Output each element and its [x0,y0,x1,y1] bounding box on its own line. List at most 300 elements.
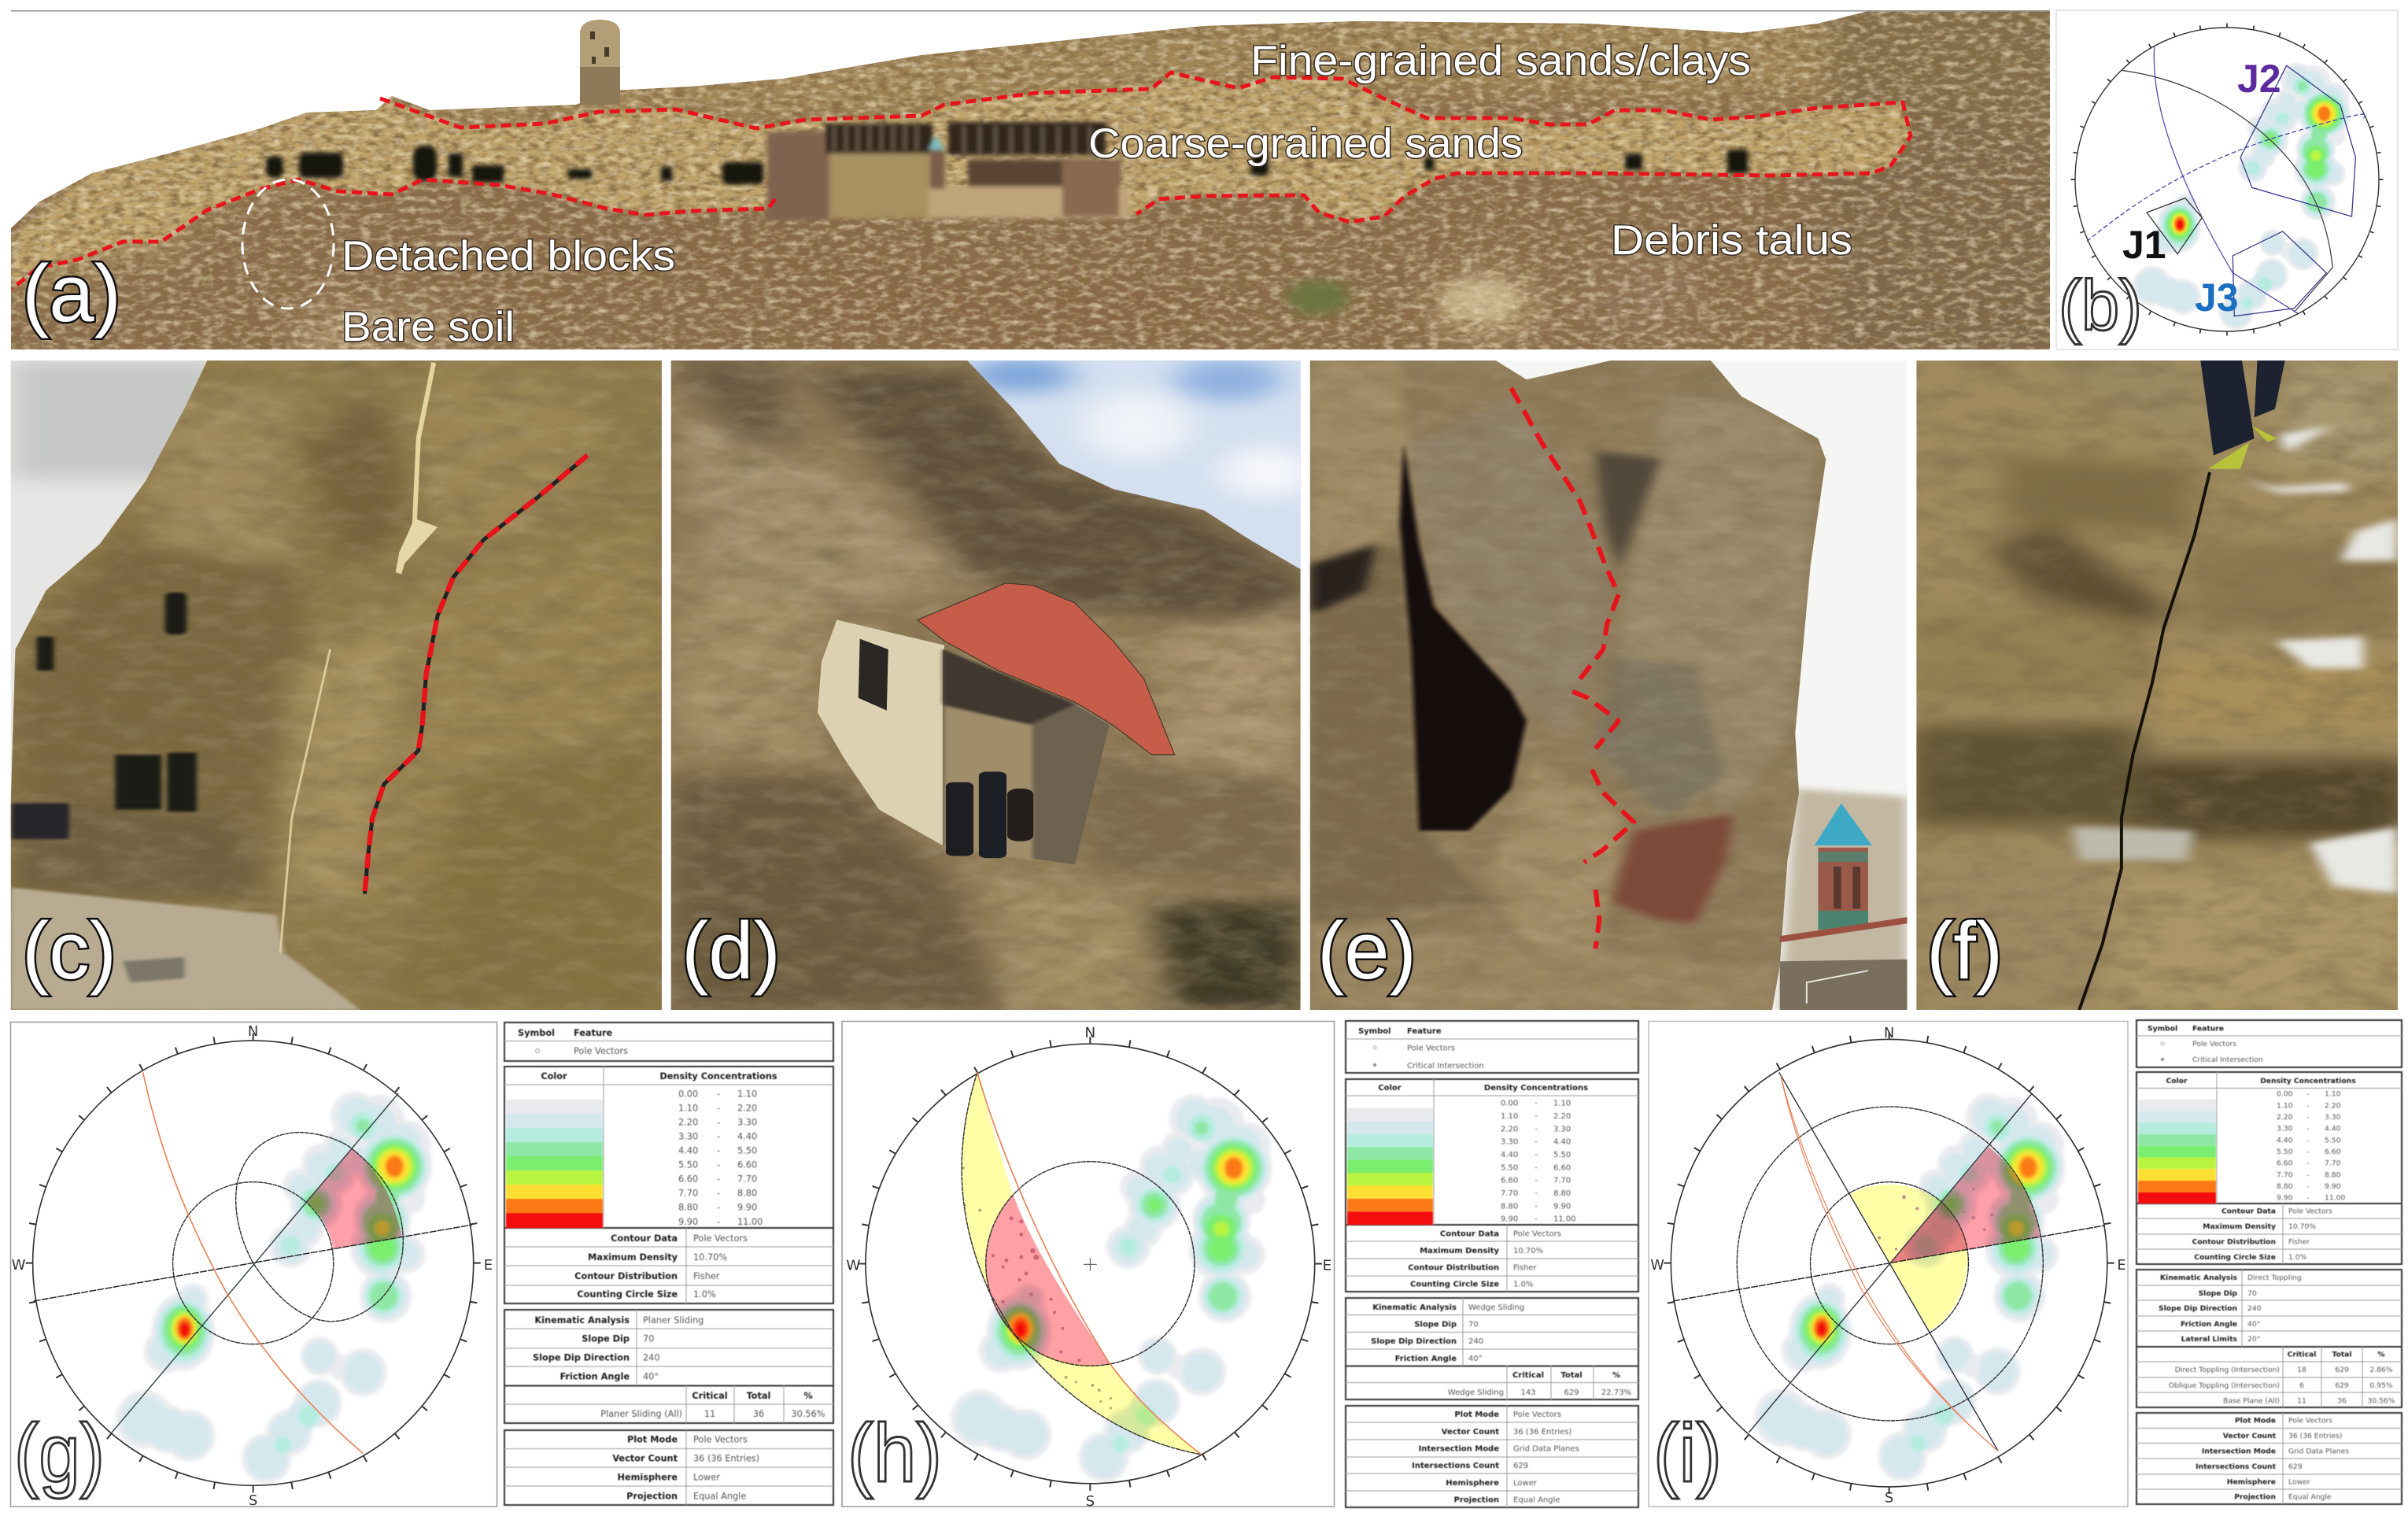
color scale [2138,1100,2216,1204]
density values: - [717,1146,720,1156]
kinematic analysis: Wedge Sliding [1468,1303,1524,1312]
friction circle [986,1162,1195,1366]
contour data: Fisher [2288,1237,2310,1247]
plot settings: 36 (36 Entries) [693,1453,759,1464]
church tower [1780,804,1908,1010]
net ticks [862,1041,1318,1487]
contour data: Maximum Density [588,1252,678,1263]
density values [2166,1077,2356,1203]
kinematic analysis [533,1315,704,1382]
net ticks [1668,1036,2111,1490]
density values: 7.70 [1501,1189,1518,1198]
density values: 6.60 [2277,1159,2293,1168]
kinematic analysis: Friction Angle [2181,1320,2237,1329]
density values: 7.70 [1553,1177,1571,1185]
density values: 1.10 [678,1104,698,1113]
density values: 3.30 [1553,1125,1571,1133]
plot settings: Plot Mode [627,1434,678,1445]
contour data: Contour Data [1440,1229,1499,1239]
color scale [506,1100,603,1228]
kinematic analysis: 20° [2247,1335,2260,1344]
kinematic analysis: 40° [1468,1355,1483,1363]
kinematic analysis: Friction Angle [560,1371,630,1382]
plot settings: Plot Mode [1454,1411,1499,1419]
red unstable overhang [918,583,1175,755]
dip line [34,1225,472,1301]
kinematic analysis: 70 [1468,1321,1479,1329]
critical results: 629 [2335,1366,2349,1374]
plot settings: Pole Vectors [1513,1411,1561,1419]
yellow wedge zone lower [1014,1335,1201,1455]
plot settings: Projection [626,1491,678,1502]
contour data: Fisher [693,1271,720,1281]
plot settings: Vector Count [1442,1428,1499,1437]
kinematic analysis: 240 [1468,1337,1483,1346]
panel letter b: (b) [2059,267,2142,346]
center cross [1084,1258,1097,1271]
coarse-grained sands band [11,72,1911,289]
watch tower [580,20,620,105]
density values: 9.90 [1501,1215,1518,1224]
critical results: Total [1560,1371,1583,1380]
cave openings [266,146,1748,184]
plot settings: Hemisphere [1446,1479,1499,1488]
contour data: Counting Circle Size [1410,1280,1499,1289]
joint windows and planes [2087,46,2366,316]
plot settings: Hemisphere [617,1472,678,1483]
density values: Density Concentrations [2260,1077,2356,1085]
daylight envelope [236,1133,403,1322]
critical results: Critical [2288,1351,2316,1359]
monastery complex [767,122,1128,220]
plot settings: Grid Data Planes [1513,1445,1579,1453]
density values: 8.80 [2277,1182,2293,1191]
symbol legend: Pole Vectors [574,1046,628,1056]
dip line [1673,1226,2105,1301]
plot settings: Projection [1454,1496,1499,1505]
plot settings: Equal Angle [2288,1492,2332,1502]
critical results: 629 [2335,1381,2349,1390]
critical results: 36 [753,1409,764,1419]
density values: 7.70 [737,1174,757,1185]
panel (h): wedge sliding stereonet [842,1022,1335,1510]
snow patches [2071,426,2398,894]
density values: - [717,1189,720,1199]
net circle [33,1041,474,1485]
density values: 5.50 [2277,1148,2293,1156]
panel letter c: (c) [22,905,116,996]
plot settings: Lower [693,1472,720,1483]
open joint crack [364,456,587,894]
plot settings: Plot Mode [2235,1417,2276,1425]
kinematic analysis: 240 [643,1352,660,1363]
critical results [600,1391,825,1419]
density values: 0.00 [678,1089,698,1099]
pale vein [399,363,434,574]
critical results: 30.56% [2367,1396,2395,1406]
plot settings: Intersection Mode [1419,1445,1499,1453]
critical results: % [2377,1351,2385,1359]
kinematic analysis: 70 [643,1333,654,1344]
slope great circle double [1781,1076,1998,1451]
density values: Color [541,1071,567,1082]
label J3: J3 [2195,275,2239,320]
density values: - [2306,1182,2310,1191]
density values: 4.40 [678,1146,698,1156]
kinematic analysis [2159,1274,2302,1344]
plot settings: Intersection Mode [2202,1447,2276,1456]
kinematic analysis: Slope Dip Direction [2159,1304,2237,1313]
yellow toppling zone upper [1850,1185,1941,1263]
critical results: Critical [1512,1371,1544,1380]
panel (f): close-up vertical fracture [1911,361,2408,1012]
contour data: 1.0% [693,1289,716,1300]
contour data: Contour Distribution [2192,1237,2276,1247]
net ticks [29,1037,477,1489]
critical results: Total [2332,1351,2352,1359]
kinematic analysis: Friction Angle [1395,1355,1457,1363]
density values: Color [1378,1084,1402,1093]
panel letter f: (f) [1926,905,2003,996]
density values: - [1535,1189,1538,1198]
density values: - [717,1217,720,1227]
kinematic analysis: 240 [2247,1304,2262,1313]
density values: - [717,1160,720,1170]
white chapel wall [818,619,944,845]
plot settings: 629 [1513,1462,1528,1470]
symbol legend [2148,1025,2263,1064]
kinematic analysis: 40° [643,1371,659,1382]
table (g): planar sliding legend and results [504,1022,833,1505]
density values: 9.90 [737,1203,757,1213]
panel letter e: (e) [1317,905,1416,996]
plot settings: 36 (36 Entries) [2288,1432,2342,1440]
density contours [2133,63,2351,330]
symbol legend: Critical Intersection [2192,1056,2263,1064]
density values: 5.50 [1553,1151,1571,1159]
critical results: Total [747,1391,770,1401]
panel letter a: (a) [22,248,121,338]
chapel window [859,639,888,711]
density values: - [717,1132,720,1142]
plot settings: 629 [2288,1462,2303,1471]
density values: - [1535,1177,1538,1185]
density values: 11.00 [737,1217,763,1227]
panel (b): joint set stereonet [2056,10,2398,349]
density values: - [1535,1163,1538,1172]
panel (c): rock face with open joint [11,361,662,1010]
label: debris talus: Debris talus [1611,217,1852,264]
density values: 5.50 [678,1160,698,1170]
compass labels: N [1884,1025,1894,1041]
kinematic analysis: Slope Dip [2199,1289,2237,1298]
label J2: J2 [2237,57,2281,101]
density values: 2.20 [1501,1125,1518,1133]
density values: - [2306,1148,2310,1156]
climber legs and shoes [2200,361,2285,469]
plot settings: 36 (36 Entries) [1513,1428,1572,1437]
density values: 2.20 [1553,1112,1571,1121]
compass labels: E [2117,1257,2125,1274]
contour data: 1.0% [2288,1253,2307,1262]
label J1: J1 [2122,223,2166,267]
plot settings: Vector Count [612,1453,678,1464]
contour data: Pole Vectors [1513,1229,1561,1239]
symbol legend: Symbol [2148,1025,2177,1033]
density values: 8.80 [1553,1189,1571,1198]
plot settings: Lower [2288,1478,2310,1486]
density values: 2.20 [737,1104,757,1113]
symbol legend: Pole Vectors [2192,1040,2236,1048]
critical results: 0.95% [2369,1381,2393,1390]
compass labels: W [1650,1257,1664,1274]
contour data: 10.70% [693,1252,727,1263]
structural lines [1749,1072,2032,1451]
label: coarse-grained: Coarse-grained sands [1088,120,1523,167]
contour data [1408,1229,1561,1289]
density values: - [717,1104,720,1113]
contour data: Contour Data [611,1233,678,1244]
density values: 7.70 [2325,1159,2341,1168]
kinematic analysis: Kinematic Analysis [2160,1274,2238,1282]
density values: 9.90 [2325,1182,2341,1191]
contour data: Pole Vectors [2288,1207,2332,1215]
density values: - [1535,1112,1538,1121]
density values: 3.30 [678,1132,698,1142]
density values: 11.00 [2325,1194,2345,1203]
contour data: Contour Distribution [574,1271,678,1281]
slope great circle [143,1072,363,1453]
density values: 5.50 [2325,1136,2341,1144]
density values: 5.50 [737,1146,757,1156]
kinematic analysis: Slope Dip Direction [533,1352,630,1363]
critical results: % [1612,1371,1620,1380]
table (i): direct toppling legend and results [2137,1020,2402,1504]
red dashed joint trace [364,456,587,894]
panel (a): panoramic slope photograph [11,0,2062,362]
inner circles [1737,1107,2043,1421]
contour data: 1.0% [1513,1280,1533,1289]
plot settings: Hemisphere [2227,1478,2276,1486]
symbol legend: Feature [574,1028,613,1038]
slope line [109,1093,398,1436]
critical results: 629 [1564,1388,1579,1397]
kinematic analysis: Slope Dip [1414,1321,1457,1329]
panel (d): chapel with unstable overhang [671,358,1313,1010]
panel (e): detached block with red dashed crack [1310,361,1908,1010]
density values: 4.40 [1553,1138,1571,1147]
kinematic analysis: Kinematic Analysis [534,1315,630,1326]
compass labels [12,1023,493,1509]
label: bare soil: Bare soil [342,304,515,350]
color scale [1347,1108,1433,1225]
contour data: Contour Distribution [1408,1264,1499,1272]
compass labels: S [1885,1490,1893,1507]
plot settings [2196,1417,2349,1502]
critical intersections [992,1216,1081,1362]
kinematic analysis: Direct Toppling [2247,1274,2302,1282]
density values: 5.50 [1501,1163,1518,1172]
red dashed crack trace [1511,388,1619,679]
contour data: Maximum Density [2203,1222,2276,1231]
vertical fracture [2079,472,2210,1010]
density values: 6.60 [2325,1148,2341,1156]
density values: 11.00 [1553,1215,1576,1224]
hillside terrain [11,0,2062,362]
density contours [1754,1093,2066,1481]
critical results: Wedge Sliding [1448,1388,1504,1397]
density values: - [2306,1090,2310,1099]
density values: 4.40 [2277,1136,2293,1144]
plot settings: Intersections Count [2196,1462,2277,1471]
density contours [951,1094,1272,1482]
density values: 6.60 [1553,1163,1571,1172]
kinematic analysis: Slope Dip [582,1333,630,1344]
pink critical zone [1889,1147,2040,1263]
density values [541,1071,777,1227]
dark cavity [1400,442,1527,830]
symbol legend: Pole Vectors [1407,1044,1455,1053]
critical results: 11 [704,1409,715,1419]
plot settings [1412,1411,1579,1505]
density values: - [2306,1194,2310,1203]
density values: 1.10 [1501,1112,1518,1121]
panel letter i: (i) [1653,1407,1722,1499]
density values: 2.20 [678,1118,698,1128]
critical results [2169,1351,2395,1406]
detached blocks dashed ellipse [242,179,334,309]
critical results: 22.73% [1601,1388,1631,1397]
critical results: 143 [1520,1388,1536,1397]
density values: 3.30 [1501,1138,1518,1147]
density values: 2.20 [2277,1113,2293,1122]
kinematic analysis: Kinematic Analysis [1372,1303,1457,1312]
critical results: Base Plane (All) [2223,1396,2280,1406]
table (h): wedge sliding legend and results [1346,1021,1638,1507]
plot settings [612,1434,759,1502]
contour data [2192,1207,2332,1262]
plot settings: Grid Data Planes [2288,1447,2349,1456]
contour data: Maximum Density [1420,1247,1499,1255]
net circle [866,1044,1315,1484]
overlap shading [1889,1202,1968,1263]
density values [1378,1084,1588,1224]
density values: - [717,1089,720,1099]
density values: - [717,1118,720,1128]
contour data: Pole Vectors [693,1233,748,1244]
net ticks [2073,25,2381,334]
density values: - [1535,1202,1538,1211]
kinematic analysis: Slope Dip Direction [1371,1337,1457,1346]
density values: 4.40 [2325,1125,2341,1133]
density values: Density Concentrations [659,1071,777,1082]
critical results: Critical [692,1391,728,1401]
symbol legend: Critical Intersection [1407,1062,1484,1070]
net circle [1671,1039,2107,1487]
yellow toppling zone lower [1889,1249,1968,1331]
kinematic analysis: Planer Sliding [643,1315,704,1326]
density values: - [2306,1170,2310,1179]
critical results: % [803,1391,813,1401]
critical results: 30.56% [791,1409,825,1419]
density values: 3.30 [737,1118,757,1128]
red dashed lower boundary [12,179,775,289]
density values: 0.00 [1501,1100,1518,1108]
reddish patch [1611,814,1734,923]
density values: 6.60 [678,1174,698,1185]
kinematic analysis: 40° [2247,1320,2260,1329]
density values: 1.10 [2325,1090,2341,1099]
symbol legend: Feature [2192,1025,2224,1033]
density values: - [1535,1215,1538,1224]
density values: - [2306,1136,2310,1144]
plot settings: Equal Angle [1513,1496,1560,1505]
kinematic analysis: Lateral Limits [2181,1335,2238,1344]
panel letter d: (d) [681,905,781,996]
compass labels: W [846,1258,861,1274]
density values: - [1535,1100,1538,1108]
contour data: 10.70% [2288,1222,2316,1231]
panel letter g: (g) [14,1407,105,1499]
cave openings [12,593,197,839]
compass labels: E [484,1257,493,1274]
kinematic analysis: 70 [2247,1289,2257,1298]
density values: 9.90 [678,1217,698,1227]
density values: 8.80 [678,1203,698,1213]
critical results: 11 [2297,1396,2306,1406]
friction circle [173,1182,334,1344]
density values: 3.30 [2277,1125,2293,1133]
panel letter h: (h) [848,1407,942,1499]
net circle [2075,28,2379,331]
density values: 1.10 [2277,1101,2293,1110]
density values: - [2306,1113,2310,1122]
plot settings: Projection [2234,1492,2276,1502]
compass labels: S [1085,1493,1095,1510]
panel (i): direct toppling stereonet [1649,1022,2128,1507]
density values: - [2306,1159,2310,1168]
density values: 8.80 [2325,1170,2341,1179]
red dashed crack trace lower [1572,692,1634,948]
chapel opening [943,649,1110,864]
slope great circle [977,1072,1201,1455]
density values: 9.90 [1553,1202,1571,1211]
plot settings: Pole Vectors [2288,1417,2332,1425]
density values: 2.20 [2325,1101,2341,1110]
symbol legend: Feature [1407,1027,1442,1036]
contour data: Counting Circle Size [577,1289,678,1300]
density values: - [1535,1125,1538,1133]
density values: 1.10 [1553,1100,1571,1108]
wedge envelope arc [962,1072,1201,1455]
density values: 7.70 [2277,1170,2293,1179]
density values: - [717,1174,720,1185]
density values: - [2306,1101,2310,1110]
critical results: 36 [2337,1396,2347,1406]
density values: 6.60 [1501,1177,1518,1185]
pink critical zone [986,1194,1110,1366]
density values: 1.10 [737,1089,757,1099]
critical results [1448,1371,1631,1397]
sky [952,358,1313,580]
critical results: 18 [2297,1366,2306,1374]
symbol legend [518,1028,628,1056]
distant landscape [1780,789,1908,1010]
yellow wedge zone upper [962,1072,1013,1293]
symbol legend: Symbol [1358,1027,1391,1036]
critical results: Direct Toppling (Intersection) [2175,1366,2280,1374]
pole points in yellow zone [962,1167,1112,1409]
